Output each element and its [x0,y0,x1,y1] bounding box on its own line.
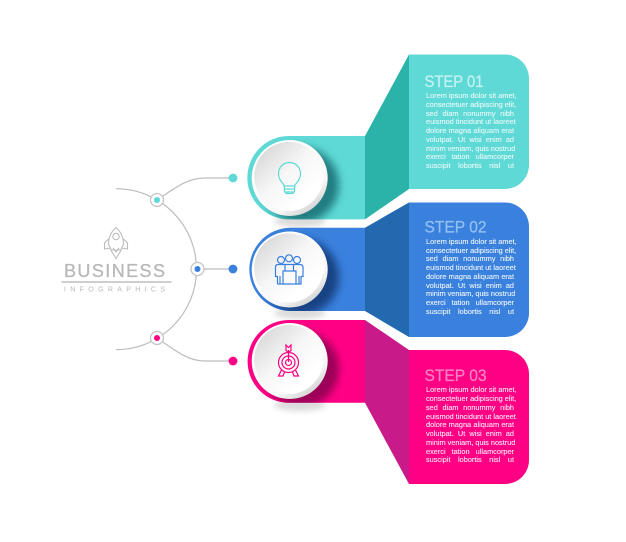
text block: volutpat. Ut wisi enim ad [426,429,514,438]
circle [252,232,328,308]
tab [249,228,365,311]
panel: step 03 [248,320,529,484]
card [409,350,529,484]
text block: volutpat. Ut wisi enim ad [426,281,514,290]
tab [247,136,365,219]
text block: sed diam nonummy nibh [426,403,514,412]
connector nodes [150,174,237,365]
circle shadow [263,147,339,223]
text block [426,386,516,468]
text block: minim veniam, quis nostrud [426,144,515,152]
icon: team [276,255,303,284]
text block: euismod tincidunt ut laoreet [426,412,516,421]
card [409,202,529,337]
text block: exerci tation ullamcorper [426,298,514,307]
text block: suscipit lobortis nisl ut [426,161,514,170]
text block: euismod tincidunt ut laoreet [426,117,516,126]
text block: exerci tation ullamcorper [426,447,514,456]
text block [426,238,516,320]
title: business infographics: INFOGRAPHICS [64,286,165,293]
text block: consectetuer adipiscing elit, [426,394,516,403]
circle shadow [263,331,339,407]
text block: euismod tincidunt ut laoreet [426,263,516,272]
text block: dolore magna aliquam erat [426,126,514,135]
heading: STEP 03 [424,367,486,385]
panel: step 01 [247,54,529,227]
text block: minim veniam, quis nostrud [426,289,515,298]
panel: step 02 [249,202,529,337]
fold [365,320,409,484]
circle shadow [263,239,339,315]
text block: suscipit lobortis nisl ut [426,455,514,464]
text block [426,92,516,174]
text block: sed diam nonummy nibh [426,254,514,263]
text block: dolore magna aliquam erat [426,420,514,429]
text block: dolore magna aliquam erat [426,272,514,281]
text block: consectetuer adipiscing elit, [426,246,516,255]
title: business infographics: BUSINESS [64,261,165,281]
circle [252,323,328,399]
icon: rocket [104,228,128,258]
icon: light bulb [278,162,300,194]
title: business infographics [62,261,172,293]
central diagram: arc and connectors [116,178,233,361]
text block: volutpat. Ut wisi enim ad [426,135,514,144]
text block: minim veniam, quis nostrud [426,438,515,447]
tab [248,320,365,403]
icon: target [278,345,298,376]
fold [365,202,409,337]
text block: consectetuer adipiscing elit, [426,100,516,109]
heading: STEP 01 [424,73,484,91]
text block: suscipit lobortis nisl ut [426,307,514,316]
circle [252,140,328,216]
text block: exerci tation ullamcorper [426,152,514,161]
text block: sed diam nonummy nibh [426,108,514,118]
heading: STEP 02 [424,218,486,236]
fold [365,54,409,219]
card [409,54,529,189]
